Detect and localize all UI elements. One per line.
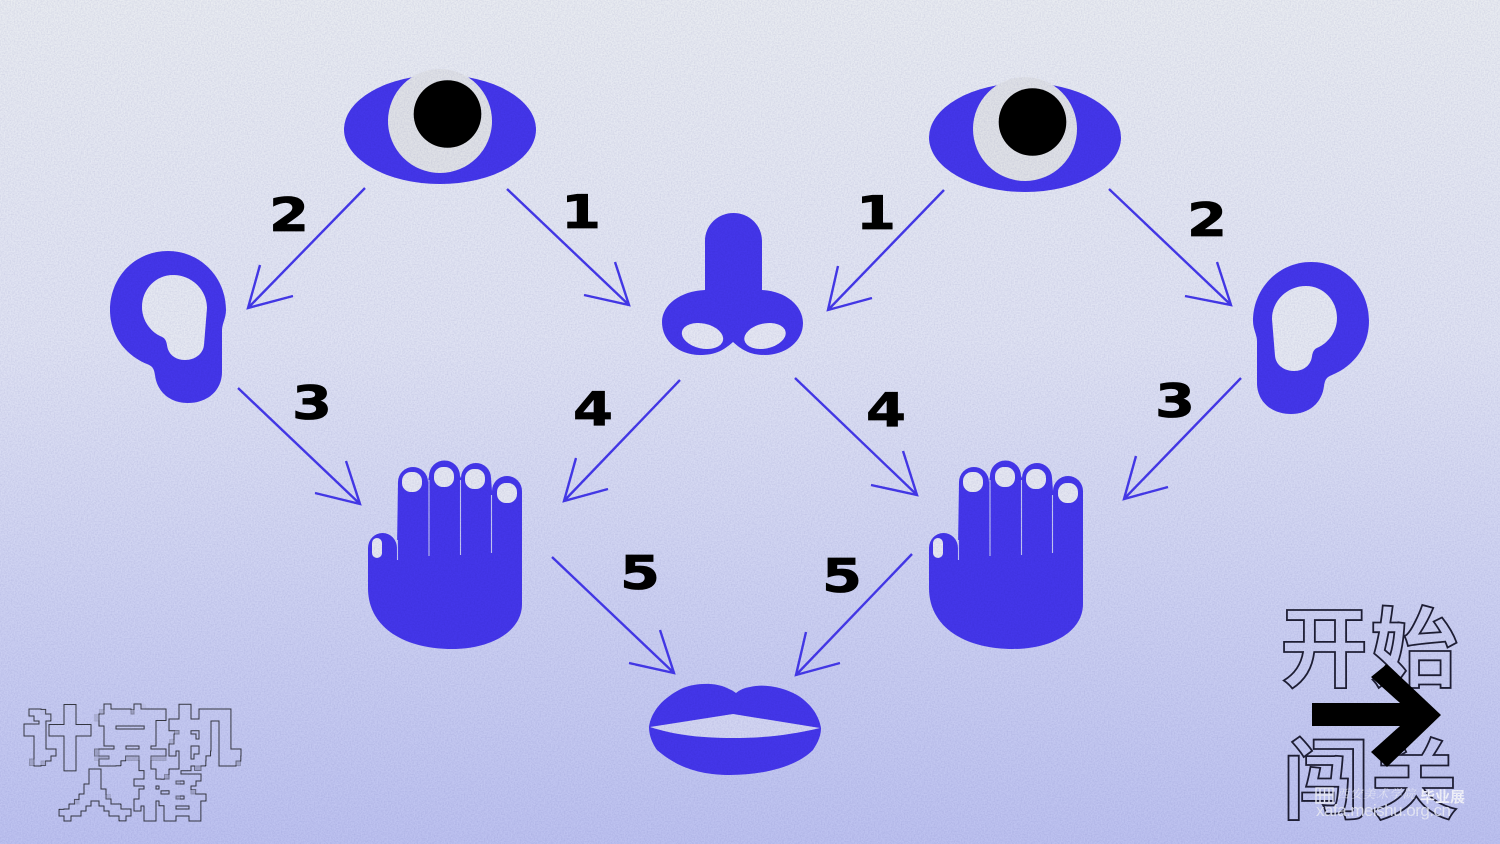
title: computer personality [22, 705, 239, 825]
watermark school name: 西安美术学院 [1337, 787, 1417, 801]
number 1 right: 1 [856, 187, 896, 240]
number 4 right: 4 [866, 384, 906, 437]
arrow: right ear to right hand [1124, 378, 1241, 499]
arrow: nose to left hand [564, 380, 680, 501]
icon: left eye [344, 69, 536, 184]
number 2 right: 2 [1187, 194, 1227, 247]
number 3 left: 3 [292, 377, 332, 430]
arrow: left ear to left hand [238, 388, 360, 504]
step numbers [269, 186, 1227, 603]
icon: black start arrow [1312, 664, 1441, 767]
number 2 left: 2 [269, 189, 309, 242]
number 1 left: 1 [561, 186, 601, 239]
icon: lips [649, 684, 821, 775]
outlined text: start level: 闯关 [1282, 732, 1458, 831]
icon: right eye [929, 77, 1121, 192]
watermark logo [1316, 788, 1333, 803]
arrow: nose to right hand [795, 378, 917, 495]
outlined text: start level: 开始 [1280, 600, 1458, 699]
number 4 left: 4 [573, 383, 613, 436]
arrow: right eye to nose [828, 190, 944, 310]
icon: left hand [368, 460, 522, 649]
icon: nose [662, 213, 803, 355]
watermark url: xafa.meishu.org.cn [1316, 801, 1451, 820]
number 5 right: 5 [822, 550, 862, 603]
watermark [1316, 787, 1465, 820]
arrow: left hand to lips [552, 557, 674, 673]
outlined text: start level [1280, 600, 1458, 831]
icon: left ear [110, 251, 226, 403]
number 3 right: 3 [1155, 375, 1195, 428]
arrow: right hand to lips [796, 554, 912, 675]
title: computer personality: 人格 [58, 767, 206, 825]
arrow: left eye to left ear [248, 188, 365, 308]
number 5 left: 5 [620, 547, 660, 600]
title: computer personality: 计算机 [22, 705, 239, 776]
watermark graduation label: 毕业展 [1420, 789, 1465, 806]
arrow: right eye to right ear [1109, 189, 1231, 305]
arrow: left eye to nose [507, 189, 629, 305]
icon: right ear [1253, 262, 1369, 414]
icon: right hand [929, 460, 1083, 649]
